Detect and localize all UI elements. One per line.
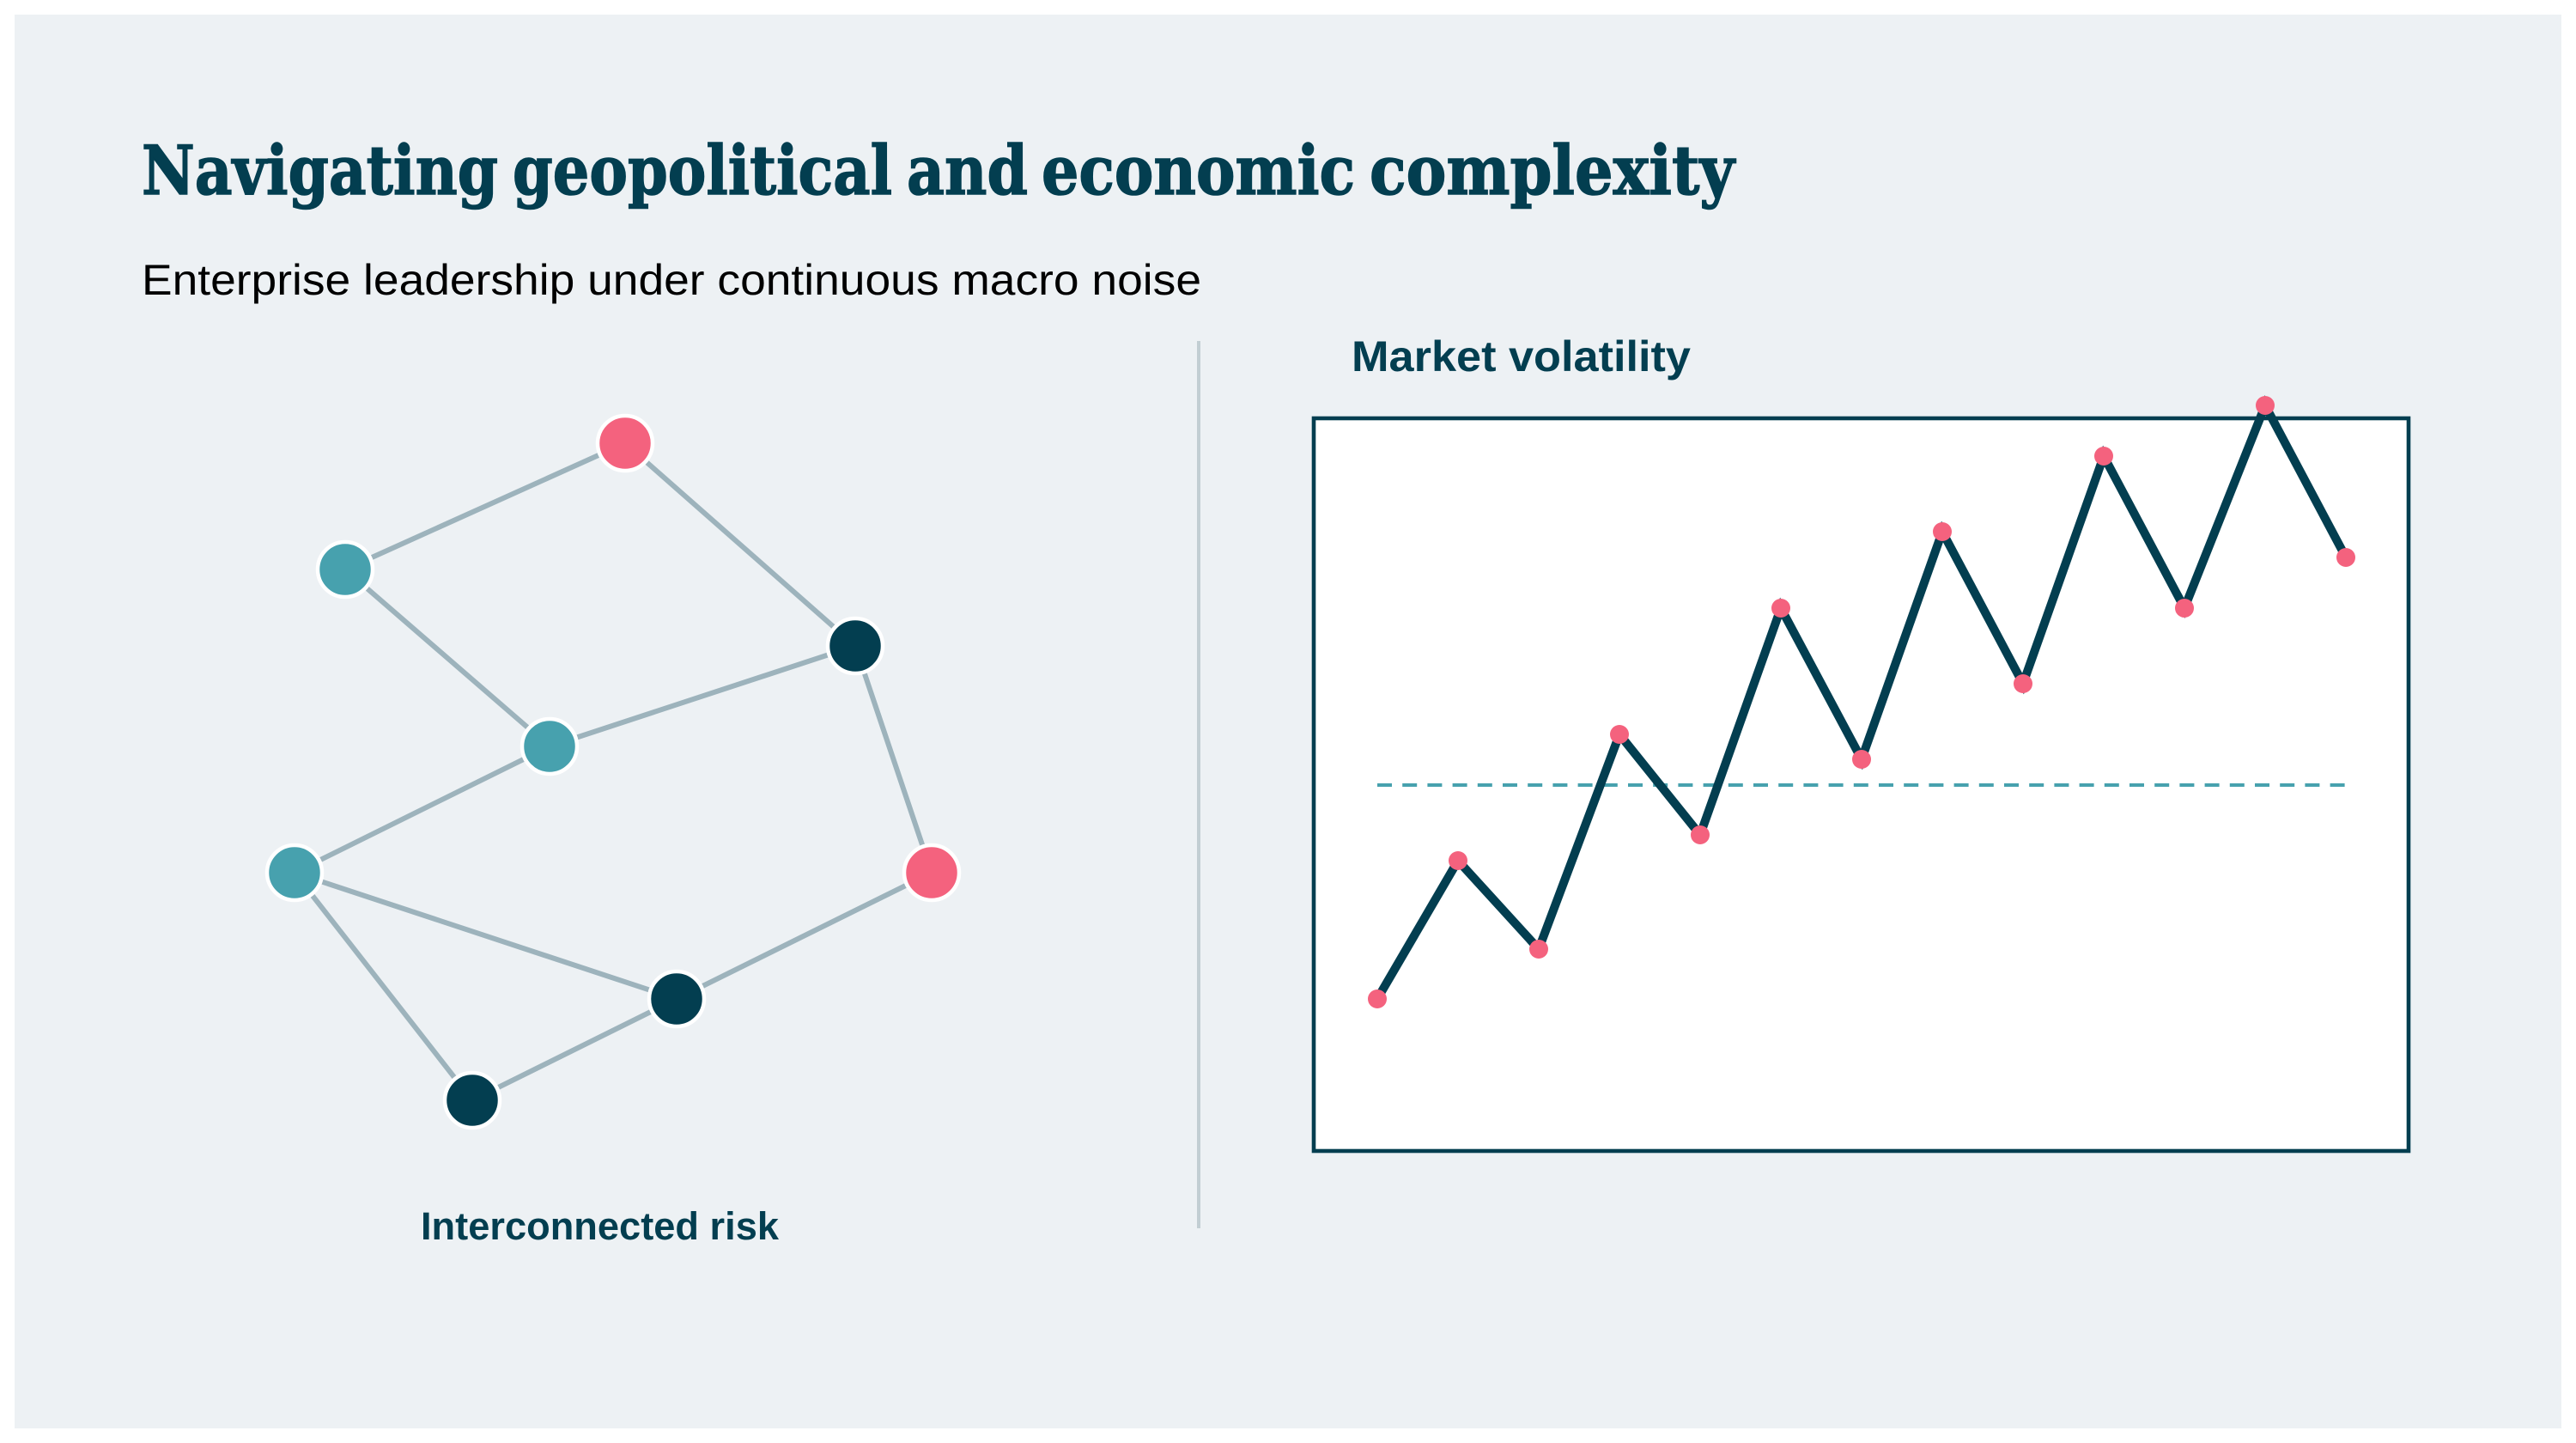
network nodes [267,416,959,1128]
title [142,131,1736,210]
title: Navigating [142,131,498,210]
title: complexity [1370,131,1736,210]
subtitle: Enterprise leadership under continuous macro noise [142,256,1201,304]
dashed trend baseline [1377,783,2345,787]
network caption: Interconnected risk [421,1204,780,1248]
data points [1368,396,2355,1008]
line chart: market volatility [1314,396,2409,1151]
title: economic [1042,131,1355,210]
network edges [295,443,932,1100]
chart heading: Market volatility [1352,332,1691,381]
chart frame [1314,418,2409,1151]
volatility line [1377,405,2346,999]
title: geopolitical [513,131,892,210]
panel: interconnected risk network [267,416,959,1128]
title: and [907,131,1028,210]
